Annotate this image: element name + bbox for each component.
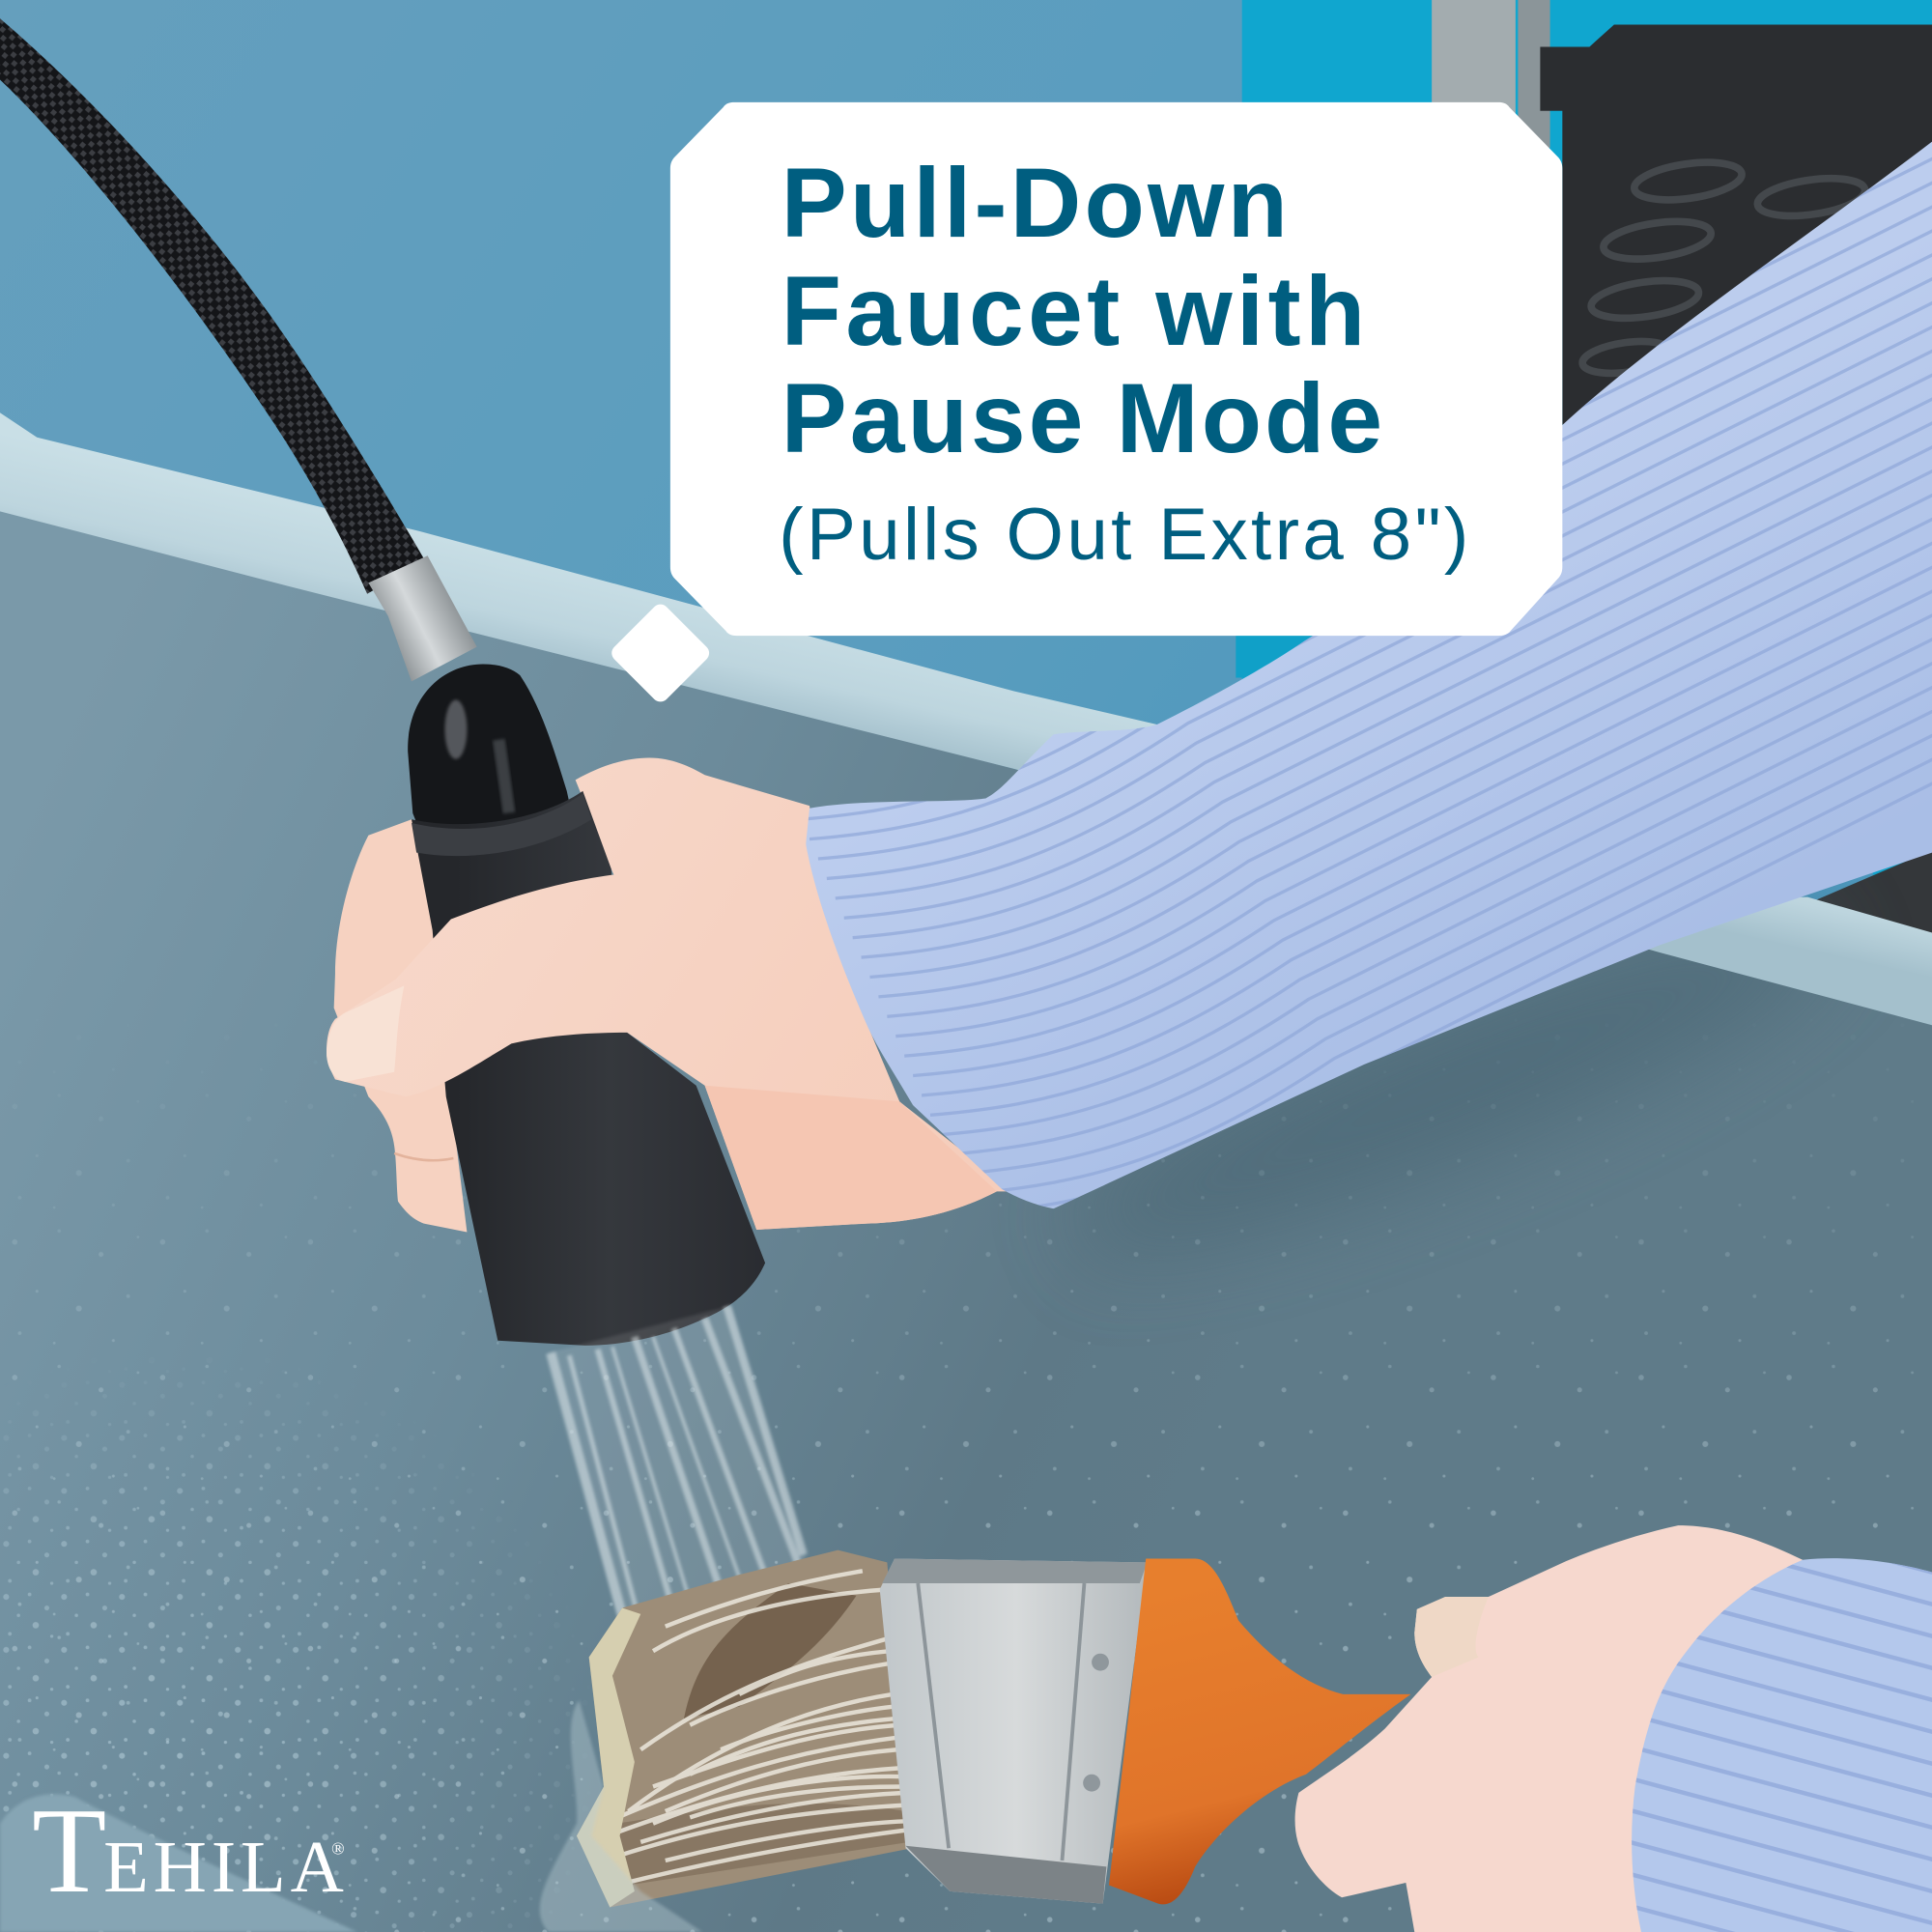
thumb on handle: [1414, 1597, 1489, 1677]
headline: [781, 148, 1382, 473]
bristles: [577, 1550, 912, 1907]
water droplets: [3, 1101, 1914, 1932]
water spray: [549, 1306, 806, 1775]
callout panel: [609, 102, 1562, 705]
faucet hose: [0, 14, 477, 681]
hose metal collar: [368, 555, 477, 681]
thumb nail: [327, 985, 404, 1082]
headline: Faucet with: [781, 256, 1365, 366]
sink basin: [0, 505, 1932, 1932]
paint brush: [577, 1550, 1410, 1907]
Tehila logo: ®: [331, 1839, 345, 1859]
sleeve upper arm: [806, 141, 1932, 1209]
rivets: [1083, 1654, 1109, 1792]
lower sleeve: [1632, 1558, 1932, 1932]
lower hand: [1295, 1525, 1803, 1932]
sink rim: [0, 412, 1932, 1025]
Tehila logo: EHILA: [103, 1826, 344, 1908]
photo background: wall: [0, 0, 1932, 936]
cyan panel behind: [1236, 0, 1932, 875]
splash under the brush: [540, 1700, 702, 1932]
callout pointer diamond: [609, 601, 713, 705]
wood handle: [1109, 1559, 1410, 1904]
sprayer grip: [412, 791, 765, 1346]
Tehila logo: [32, 1783, 345, 1918]
black cap: [408, 665, 573, 850]
metal pole: [1432, 0, 1516, 160]
sprayer fingers left: [334, 819, 467, 1233]
headline: Pause Mode: [781, 363, 1382, 473]
sprayer head: [408, 665, 765, 1346]
subheading: (Pulls Out Extra 8"): [779, 494, 1468, 576]
headline: Pull-Down: [781, 148, 1288, 258]
lower palm shading: [705, 1086, 997, 1230]
lower sink corner: [0, 1795, 357, 1932]
Tehila logo: T: [32, 1783, 106, 1918]
thumb and front fingers: [327, 875, 899, 1101]
black step: [1518, 0, 1932, 943]
hand holding sprayer (back fingers): [576, 757, 1014, 1230]
metal ferrule: [880, 1559, 1148, 1904]
